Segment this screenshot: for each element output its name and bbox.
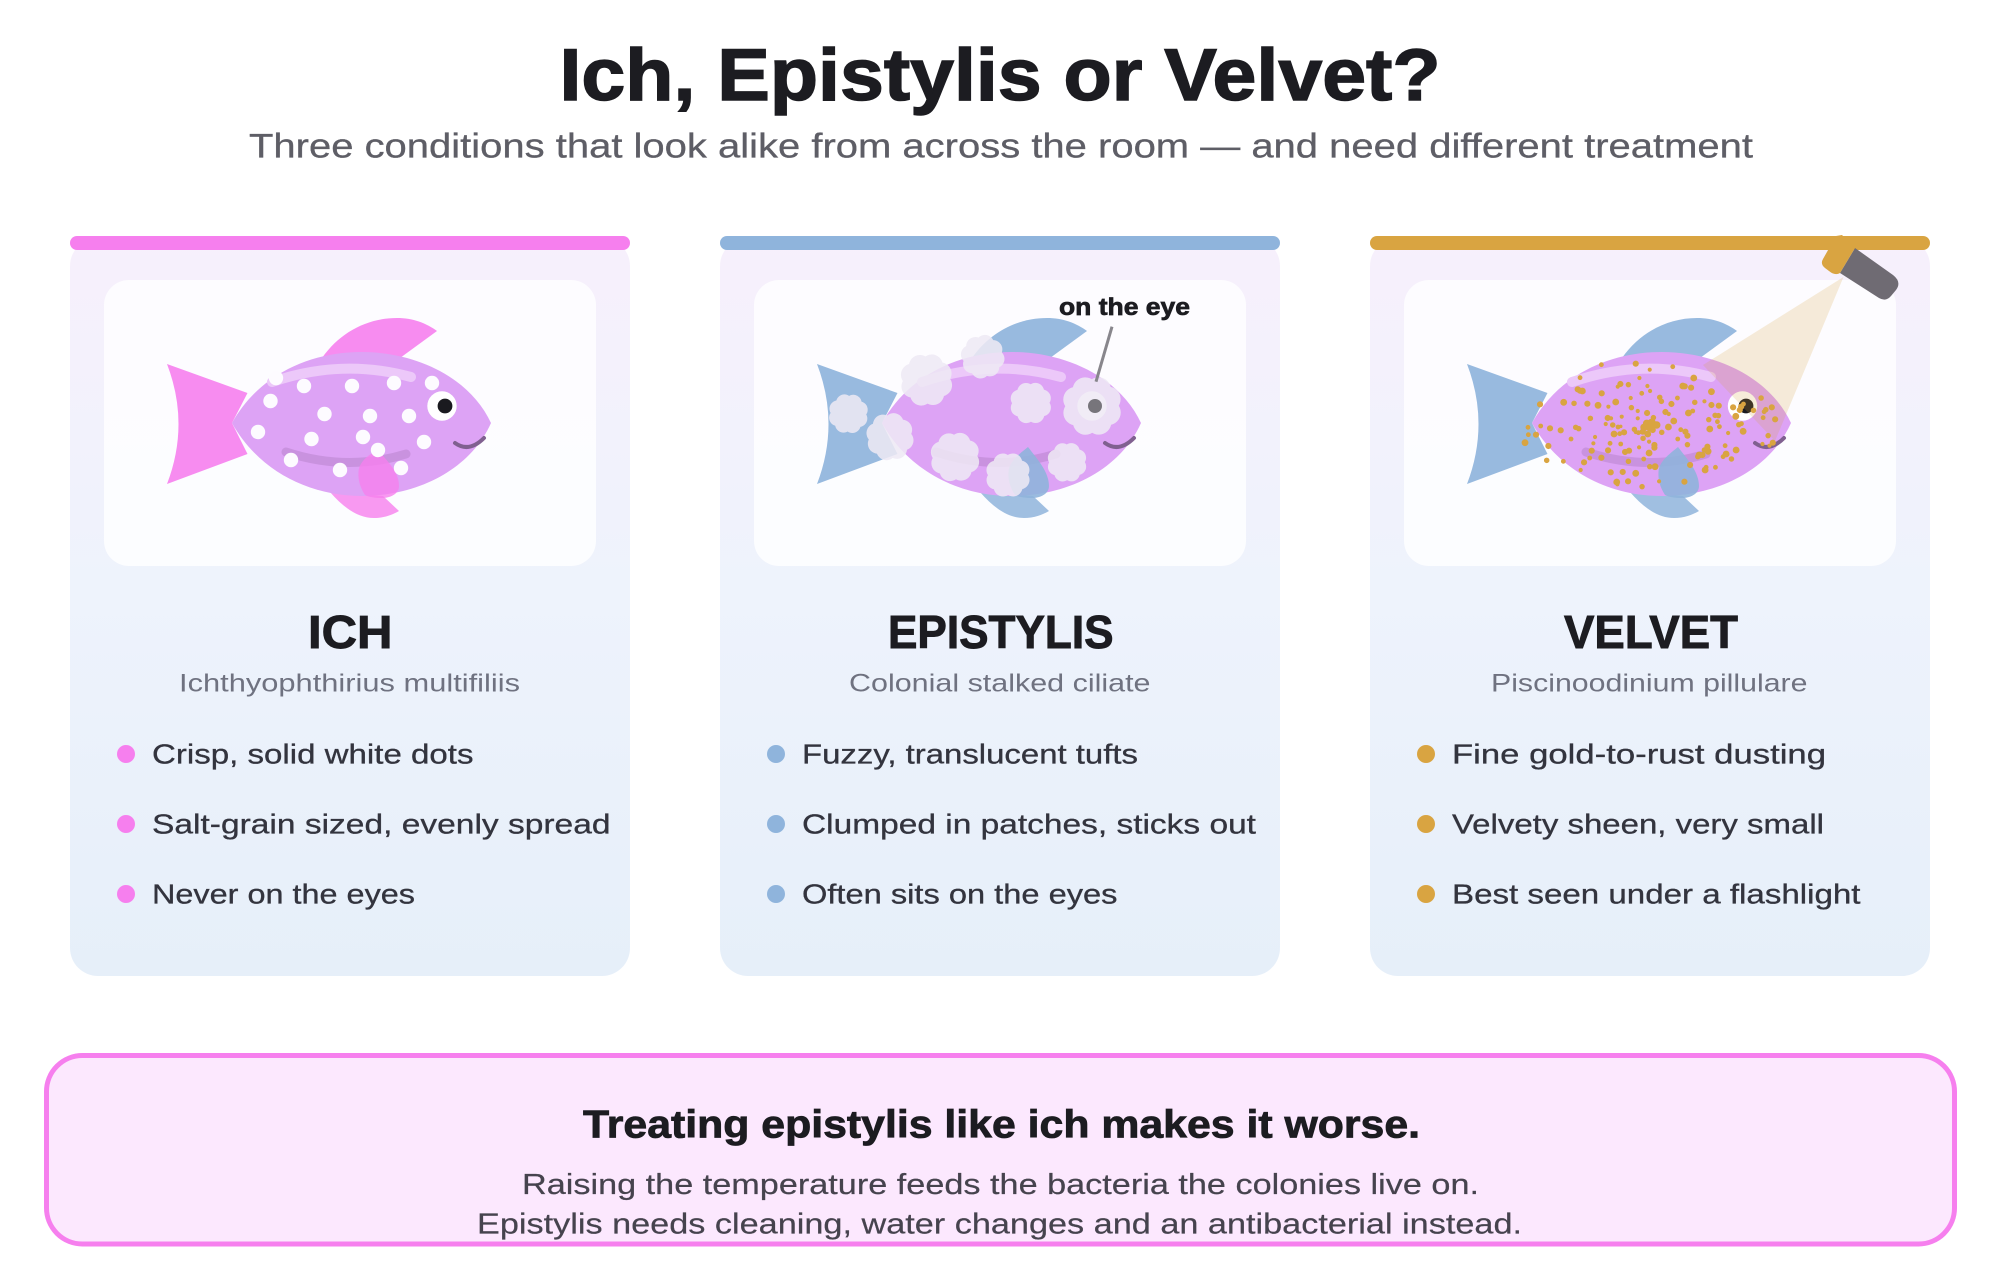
- flashlight: [1822, 235, 1898, 300]
- gold dusting: [1522, 361, 1778, 489]
- fish: epistylis: [817, 318, 1141, 518]
- latin name: velvet: Piscinoodinium pillulare: [1491, 670, 1808, 698]
- illustration panel: epistylis: [754, 280, 1246, 566]
- fish: velvet: [1467, 318, 1791, 518]
- callout box: [46, 1056, 1954, 1244]
- bullet list: epistylis: [767, 738, 1256, 909]
- callout body line 1: Raising the temperature feeds the bacteria the colonies live on.: [522, 1169, 1479, 1201]
- panel: epistylis: [720, 236, 1280, 976]
- accent bar: velvet: [1370, 236, 1930, 250]
- bullet list: ich: Salt-grain sized, evenly spread: [152, 808, 610, 839]
- bullet list: ich: Crisp, solid white dots: [152, 738, 474, 769]
- bullet list: ich: Never on the eyes: [152, 878, 415, 909]
- bullet list: velvet: [1417, 738, 1861, 909]
- warning callout: [46, 1056, 1954, 1244]
- panel: velvet: [1370, 235, 1930, 976]
- accent bar: ich: [70, 236, 630, 250]
- card background: epistylis: [720, 238, 1280, 976]
- bullet list: ich: [117, 738, 610, 909]
- panel: ich: [70, 236, 630, 976]
- illustration panel: ich: [104, 280, 596, 566]
- accent bar: epistylis: [720, 236, 1280, 250]
- callout: on the eye: [1059, 294, 1190, 382]
- white spots: [251, 371, 439, 477]
- card background: velvet: [1370, 238, 1930, 976]
- name: ich: ICH: [308, 606, 392, 658]
- bullet list: velvet: Best seen under a flashlight: [1452, 878, 1861, 909]
- covered pupil: [1088, 399, 1102, 413]
- name: velvet: VELVET: [1564, 606, 1738, 658]
- latin name: epistylis: Colonial stalked ciliate: [849, 670, 1150, 698]
- bullet list: velvet: Velvety sheen, very small: [1452, 808, 1824, 839]
- callout body line 2: Epistylis needs cleaning, water changes and an antibacterial instead.: [477, 1208, 1522, 1240]
- flashlight beam: [1703, 277, 1844, 441]
- fuzzy tufts: [822, 331, 1131, 504]
- callout: on the eye: on the eye: [1059, 294, 1190, 321]
- name: epistylis: EPISTYLIS: [888, 606, 1114, 658]
- bullet list: epistylis: Fuzzy, translucent tufts: [802, 738, 1138, 769]
- bullet list: epistylis: Clumped in patches, sticks out: [802, 808, 1256, 839]
- fish: ich with white dots: [167, 318, 491, 518]
- callout heading: Treating epistylis like ich makes it worse.: [583, 1104, 1420, 1147]
- title: Ich, Epistylis or Velvet?: [560, 35, 1440, 116]
- latin name: ich: Ichthyophthirius multifiliis: [179, 670, 520, 698]
- subtitle: Three conditions that look alike from across the room — and need different treatment: [249, 128, 1754, 166]
- card background: ich: [70, 238, 630, 976]
- illustration panel: velvet: [1404, 280, 1896, 566]
- bullet list: epistylis: Often sits on the eyes: [802, 878, 1118, 909]
- bullet list: velvet: Fine gold-to-rust dusting: [1452, 738, 1826, 769]
